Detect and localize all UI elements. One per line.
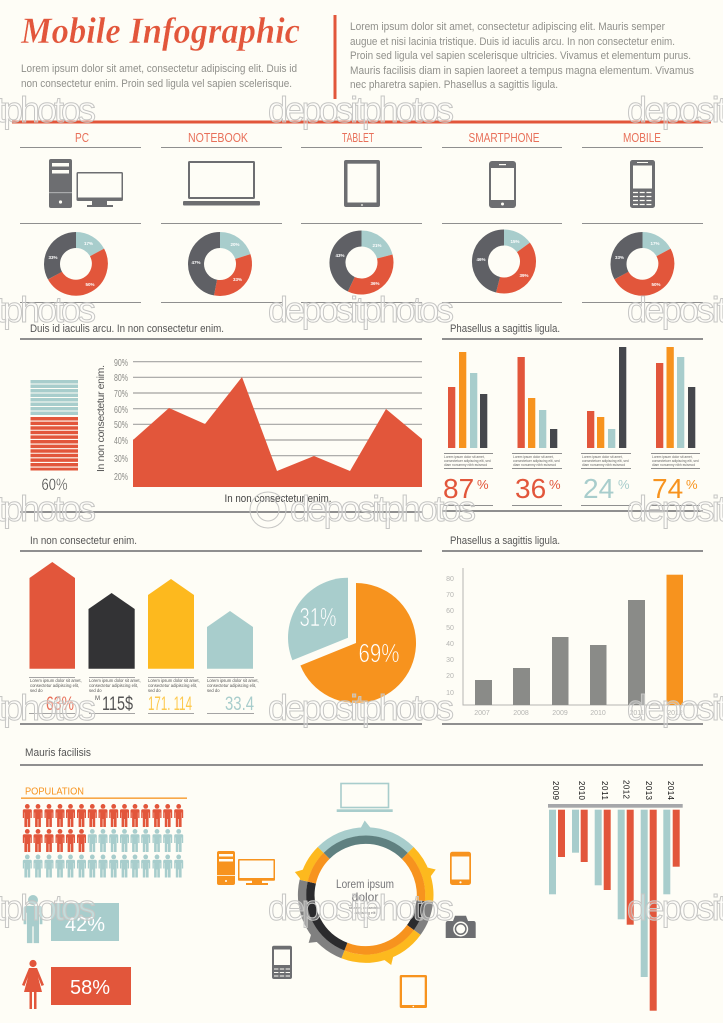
- ring diagram: dolor: [352, 890, 378, 904]
- arrow column red 63%: sed do: [30, 688, 43, 693]
- column chart: 2009: [552, 710, 568, 717]
- column chart: 80: [446, 576, 454, 583]
- column chart: 2011: [629, 710, 645, 717]
- icon: camera: [446, 916, 476, 938]
- arrow column red 63%: [29, 562, 82, 715]
- area chart: In non consectetur enim.: [95, 365, 107, 472]
- male share 42%: 42%: [65, 914, 105, 936]
- area chart: 70%: [114, 389, 128, 400]
- diverging year bars: 2009: [551, 781, 560, 801]
- column chart: 60: [446, 608, 454, 615]
- icon: orange PC: [217, 851, 275, 885]
- donut: notebook: 20%: [230, 242, 240, 247]
- watermarks: depositphotos: [268, 887, 454, 928]
- bar group 36%: Lorem ipsum dolor sit amet,: [513, 455, 554, 459]
- device column headings: MOBILE: [623, 130, 661, 145]
- bar group 24%: Lorem ipsum dolor sit amet,: [582, 455, 623, 459]
- diverging year bars: 2014: [666, 781, 675, 801]
- section rules: [20, 338, 703, 766]
- arrow column yellow 171.114: Lorem ipsum dolor sit amet,: [148, 678, 200, 683]
- intro text left: non consectetur enim. Proin sed ligula vel sapien scelerisque.: [21, 78, 292, 90]
- bar group 24%: [581, 347, 631, 506]
- donut: tablet: [335, 238, 386, 287]
- watermarks: depositphotos: [268, 289, 454, 330]
- watermarks: depositphotos: [290, 488, 476, 529]
- arrow column teal 33.4: 33.4: [225, 694, 254, 715]
- population heading: POPULATION: [25, 786, 84, 798]
- device column headings: PC: [75, 130, 89, 145]
- device column headings: SMARTPHONE: [468, 130, 540, 145]
- watermarks: depositphotos: [268, 89, 454, 130]
- arrow column teal 33.4: Lorem ipsum dolor sit amet,: [207, 678, 259, 683]
- intro text right: Proin sed ligula vel sapien scelerisque ultricies. Vivamus et elementum purus.: [350, 50, 691, 62]
- device column headings: TABLET: [342, 130, 374, 145]
- donut: tablet: 36%: [370, 281, 380, 286]
- donut: smartphone: 39%: [519, 273, 529, 278]
- male share 42%: [24, 895, 119, 943]
- intro text right: nec pharetra sapien. Phasellus a sagittis ligula.: [350, 79, 558, 91]
- ring diagram: sit amet, consectetur: [349, 906, 382, 910]
- donut: smartphone: 46%: [476, 257, 486, 262]
- area chart: 90%: [114, 358, 128, 369]
- intro text right: Lorem ipsum dolor sit amet, consectetur adipiscing elit. Mauris semper: [350, 21, 665, 33]
- donut: mobile: 17%: [650, 241, 660, 246]
- icon: orange smartphone: [450, 852, 471, 885]
- pie chart: 31%: [300, 602, 336, 632]
- icon: tablet: [344, 160, 380, 207]
- donut: PC: 17%: [84, 241, 93, 246]
- bar group 36%: [512, 357, 562, 506]
- column chart: 70: [446, 592, 454, 599]
- icon: mobile: [630, 160, 655, 208]
- arrow column red 63%: consectetur adipiscing elit,: [30, 683, 79, 688]
- pie chart: [288, 578, 416, 703]
- bar group 74%: %: [686, 477, 698, 492]
- intro text right: Mauris facilisis diam in sapien laoreet a tempus magna elementum. Vivamus: [350, 65, 694, 77]
- intro text left: [21, 63, 297, 90]
- header red rule: [12, 120, 711, 124]
- icon: grey mobile: [272, 946, 292, 979]
- icon: notebook: [183, 161, 260, 206]
- donut: notebook: 33%: [233, 277, 242, 282]
- device column rules: [20, 147, 703, 303]
- bar group 36%: consectetuer adipiscing elit, sed: [513, 459, 560, 463]
- striped gauge 60%: 60%: [42, 475, 68, 494]
- bar group 87%: %: [477, 477, 489, 492]
- ring diagram: Lorem ipsum: [336, 877, 394, 891]
- arrow column dark 115$: consectetur adipiscing elit,: [89, 683, 138, 688]
- female share 58%: [22, 960, 131, 1009]
- column chart: 2010: [590, 710, 606, 717]
- column chart: 50: [446, 625, 454, 632]
- heading: bar groups section: Phasellus a sagittis ligula.: [450, 323, 560, 335]
- bar group 24%: 24: [583, 473, 614, 504]
- diverging year bars: [548, 780, 683, 1011]
- arrow column yellow 171.114: sed do: [148, 688, 161, 693]
- bar group 74%: consectetuer adipiscing elit, sed: [652, 459, 699, 463]
- heading: yearly bars section: Phasellus a sagittis ligula.: [450, 535, 560, 547]
- bar group 24%: consectetuer adipiscing elit, sed: [582, 459, 629, 463]
- arrow column dark 115$: M: [95, 696, 100, 702]
- heading: arrows section: In non consectetur enim.: [30, 535, 137, 547]
- bar group 87%: 87: [443, 473, 474, 504]
- icon: smartphone: [489, 161, 516, 208]
- population pictogram: [23, 804, 183, 878]
- donut: notebook: 47%: [191, 260, 201, 265]
- arrow column yellow 171.114: consectetur adipiscing elit,: [148, 683, 197, 688]
- arrow column red 63%: Lorem ipsum dolor sit amet,: [30, 678, 82, 683]
- donut: tablet: 43%: [335, 253, 345, 258]
- intro text left: Lorem ipsum dolor sit amet, consectetur adipiscing elit. Duis id: [21, 63, 297, 75]
- bar group 87%: Lorem ipsum dolor sit amet,: [444, 455, 485, 459]
- intro text right: [350, 21, 694, 91]
- diverging year bars: 2010: [577, 781, 586, 801]
- bar group 87%: [443, 352, 493, 506]
- column chart: 2007: [474, 710, 490, 717]
- column chart: 2008: [513, 710, 529, 717]
- device column headings: [75, 130, 661, 145]
- bar group 24%: diam nonummy nibh euismod: [582, 463, 625, 467]
- column chart: 2012: [667, 710, 683, 717]
- donut: mobile: 50%: [651, 282, 661, 287]
- donut: tablet: 21%: [372, 243, 382, 248]
- donut: PC: 33%: [48, 255, 58, 260]
- column chart: 40: [446, 641, 454, 648]
- column chart: 20: [446, 673, 454, 680]
- donut: smartphone: 15%: [510, 239, 520, 244]
- watermarks: depositphotos: [268, 687, 454, 728]
- donut: smartphone: [476, 238, 529, 286]
- bar group 87%: diam nonummy nibh euismod: [444, 463, 487, 467]
- bar group 74%: diam nonummy nibh euismod: [652, 463, 695, 467]
- donut: mobile: 33%: [615, 255, 624, 260]
- striped gauge 60%: [42, 380, 68, 494]
- area chart: 50%: [114, 420, 128, 431]
- arrow column teal 33.4: sed do: [207, 688, 220, 693]
- arrow column yellow 171.114: 171. 114: [148, 694, 192, 715]
- arrow column dark 115$: [88, 593, 141, 715]
- arrow column dark 115$: Lorem ipsum dolor sit amet,: [89, 678, 141, 683]
- title: Mobile Infographic: [20, 11, 300, 52]
- bar group 74%: 74: [652, 473, 683, 504]
- icon: teal notebook: [337, 784, 393, 812]
- bar group 36%: diam nonummy nibh euismod: [513, 463, 556, 467]
- bar group 87%: consectetuer adipiscing elit, sed: [444, 459, 491, 463]
- donut: mobile: [615, 240, 666, 288]
- icon: PC: [49, 159, 123, 208]
- column chart: 10: [446, 690, 454, 697]
- pie chart: 69%: [358, 638, 400, 668]
- diverging year bars: 2013: [644, 781, 653, 801]
- female share 58%: 58%: [70, 977, 110, 999]
- area chart: 20%: [114, 472, 128, 483]
- area chart: 60%: [114, 405, 128, 416]
- bar group 36%: %: [549, 477, 561, 492]
- arrow column yellow 171.114: [148, 579, 200, 715]
- ring diagram: [293, 820, 437, 967]
- bar group 24%: %: [618, 477, 630, 492]
- area chart: 40%: [114, 436, 128, 447]
- heading: Mauris facilisis: Mauris facilisis: [25, 747, 91, 759]
- device column headings: NOTEBOOK: [188, 130, 248, 145]
- donut: notebook: [191, 240, 244, 288]
- arrow column teal 33.4: consectetur adipiscing elit,: [207, 683, 256, 688]
- area chart: 30%: [114, 454, 128, 465]
- diverging year bars: 2012: [622, 780, 630, 800]
- area chart: In non consectetur enim.: [224, 493, 332, 505]
- heading: area chart section: Duis id iaculis arcu. In non consectetur enim.: [30, 323, 224, 335]
- diverging year bars: 2011: [600, 781, 609, 801]
- arrow column red 63%: 63%: [46, 694, 74, 715]
- bar group 74%: [651, 347, 700, 506]
- arrow column dark 115$: 115$: [102, 694, 133, 715]
- column chart: [446, 568, 703, 717]
- bar group 36%: 36: [515, 473, 546, 504]
- donut: PC: 50%: [85, 282, 95, 287]
- icon: orange tablet: [400, 975, 427, 1008]
- column chart: 30: [446, 657, 454, 664]
- header vertical divider: [334, 15, 336, 99]
- donut: PC: [48, 240, 100, 288]
- intro text right: augue et nisi lacinia tristique. Duis id iaculis arcu. In non consectetur enim.: [350, 36, 675, 48]
- area chart: 80%: [114, 373, 128, 384]
- arrow column teal 33.4: [207, 611, 259, 715]
- bar group 74%: Lorem ipsum dolor sit amet,: [652, 455, 693, 459]
- arrow column dark 115$: sed do: [89, 688, 102, 693]
- ring diagram: adipiscing elit: [354, 911, 376, 915]
- area chart: [95, 358, 422, 505]
